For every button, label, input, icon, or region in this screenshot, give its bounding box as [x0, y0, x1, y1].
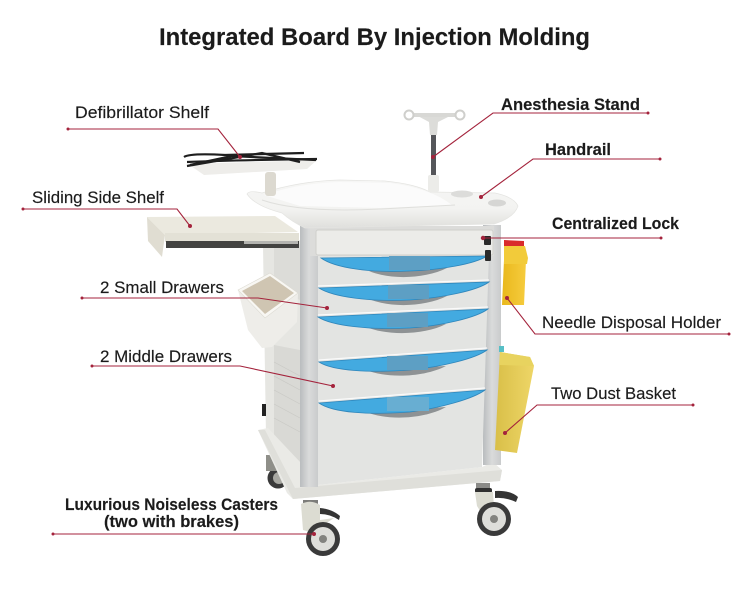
- label: Anesthesia Stand: Anesthesia Stand: [501, 96, 640, 114]
- label: 2 Middle Drawers: 2 Middle Drawers: [100, 347, 232, 366]
- handle 2: [319, 282, 489, 305]
- medical cart product image: [147, 110, 534, 556]
- label: 2 Middle Drawers: [90, 347, 335, 388]
- label: Centralized Lock: Centralized Lock: [552, 215, 680, 233]
- anesthesia stand: [404, 110, 464, 192]
- back left caster: [266, 455, 288, 488]
- drawer separators: [318, 280, 489, 401]
- label: Handrail: [479, 141, 662, 199]
- label: Luxurious Noiseless Casters: (two with brakes): [104, 513, 239, 531]
- handle 5: [319, 390, 485, 418]
- label: Anesthesia Stand: [431, 96, 650, 159]
- left column: [300, 225, 318, 487]
- label: Sliding Side Shelf: [22, 188, 192, 228]
- top lock panel: [310, 226, 494, 256]
- handle 3: [318, 309, 488, 333]
- side basket: [238, 273, 298, 348]
- label: Luxurious Noiseless Casters: [52, 496, 316, 536]
- rear right caster: [475, 483, 518, 536]
- top tray with handrail: [247, 180, 518, 228]
- label: Luxurious Noiseless Casters: Luxurious Noiseless Casters: [65, 496, 278, 514]
- label: Needle Disposal Holder: Needle Disposal Holder: [542, 313, 721, 332]
- sliding side shelf: [147, 216, 299, 257]
- handle 1: [321, 256, 487, 277]
- label: 2 Small Drawers: 2 Small Drawers: [100, 278, 224, 297]
- label: 2 Small Drawers: [80, 278, 329, 310]
- front caster: [301, 500, 340, 556]
- label: Two Dust Basket: Two Dust Basket: [551, 384, 676, 403]
- label: Handrail: Handrail: [545, 141, 611, 159]
- drawer body: [318, 254, 489, 485]
- side panel: [262, 240, 302, 470]
- label: Sliding Side Shelf: Sliding Side Shelf: [32, 188, 164, 207]
- label: Defibrillator Shelf: [66, 103, 242, 159]
- drawer handles: [318, 256, 489, 418]
- label: Two Dust Basket: [503, 384, 694, 435]
- label: Centralized Lock: [481, 215, 680, 240]
- title: Integrated Board By Injection Molding: [159, 24, 590, 51]
- dust basket: [495, 346, 534, 453]
- needle disposal holder: [502, 240, 528, 305]
- centralized lock: [484, 236, 491, 261]
- label: Defibrillator Shelf: Defibrillator Shelf: [75, 103, 209, 122]
- handle 4: [319, 350, 487, 376]
- label: Needle Disposal Holder: [505, 296, 730, 336]
- base platform: [258, 428, 502, 499]
- right column: [483, 225, 501, 465]
- defibrillator shelf: [184, 153, 317, 196]
